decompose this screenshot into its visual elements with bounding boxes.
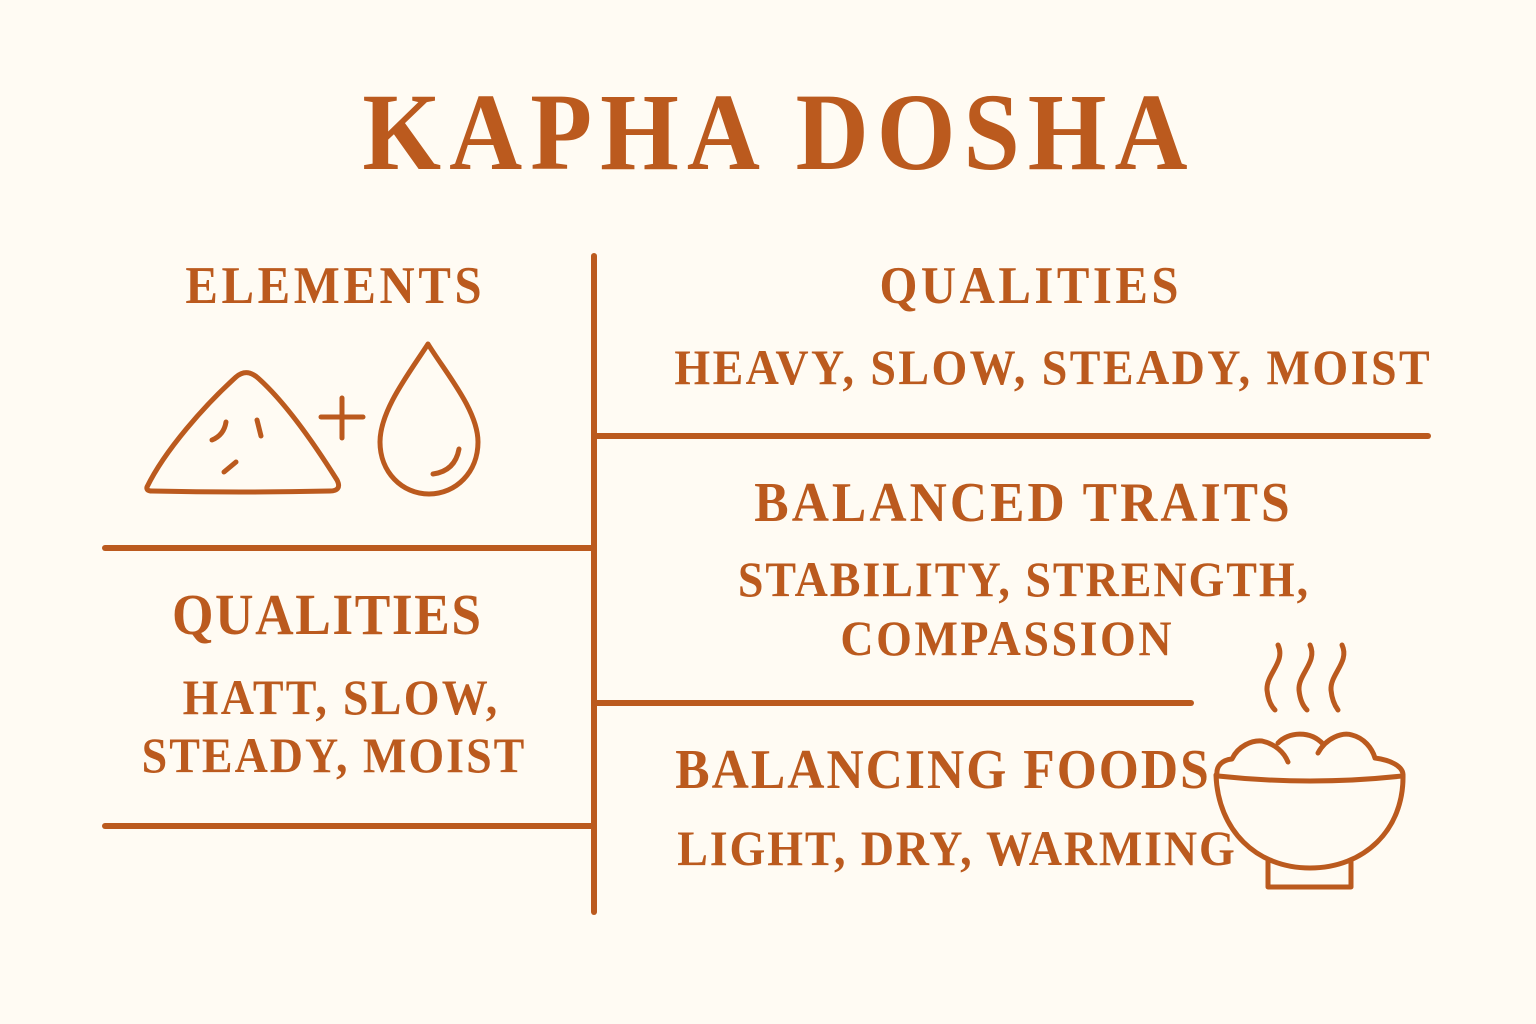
text: balancing foods list: LIGHT, DRY, WARMING — [677, 821, 1235, 876]
heading: balancing foods: BALANCING FOODS — [675, 738, 1209, 800]
icon: earth mound — [147, 373, 339, 492]
divider lines — [105, 256, 1428, 912]
panel: left qualities — [142, 583, 524, 783]
icon: water drop — [380, 344, 478, 494]
text: balanced traits list: STABILITY, STRENGTH, — [738, 552, 1308, 607]
text: left qualities list: STEADY, MOIST — [142, 728, 524, 783]
heading: left qualities: QUALITIES — [172, 583, 481, 648]
text: balanced traits list — [738, 552, 1308, 666]
heading: right qualities: QUALITIES — [879, 257, 1179, 315]
panel: balancing foods — [675, 645, 1403, 887]
text: left qualities list — [142, 670, 524, 783]
icon: plus — [321, 398, 363, 438]
heading: elements: ELEMENTS — [185, 257, 482, 315]
panel: elements — [147, 257, 482, 494]
text: balanced traits list: COMPASSION — [840, 611, 1172, 666]
text: right qualities list: HEAVY, SLOW, STEADY, MOIST — [674, 340, 1430, 395]
panel: balanced traits — [738, 471, 1308, 666]
panel: right qualities — [674, 257, 1430, 395]
text: left qualities list: HATT, SLOW, — [183, 670, 497, 725]
title: KAPHA DOSHA — [362, 71, 1188, 193]
heading: balanced traits: BALANCED TRAITS — [754, 471, 1290, 533]
icon: steaming bowl — [1216, 645, 1403, 887]
